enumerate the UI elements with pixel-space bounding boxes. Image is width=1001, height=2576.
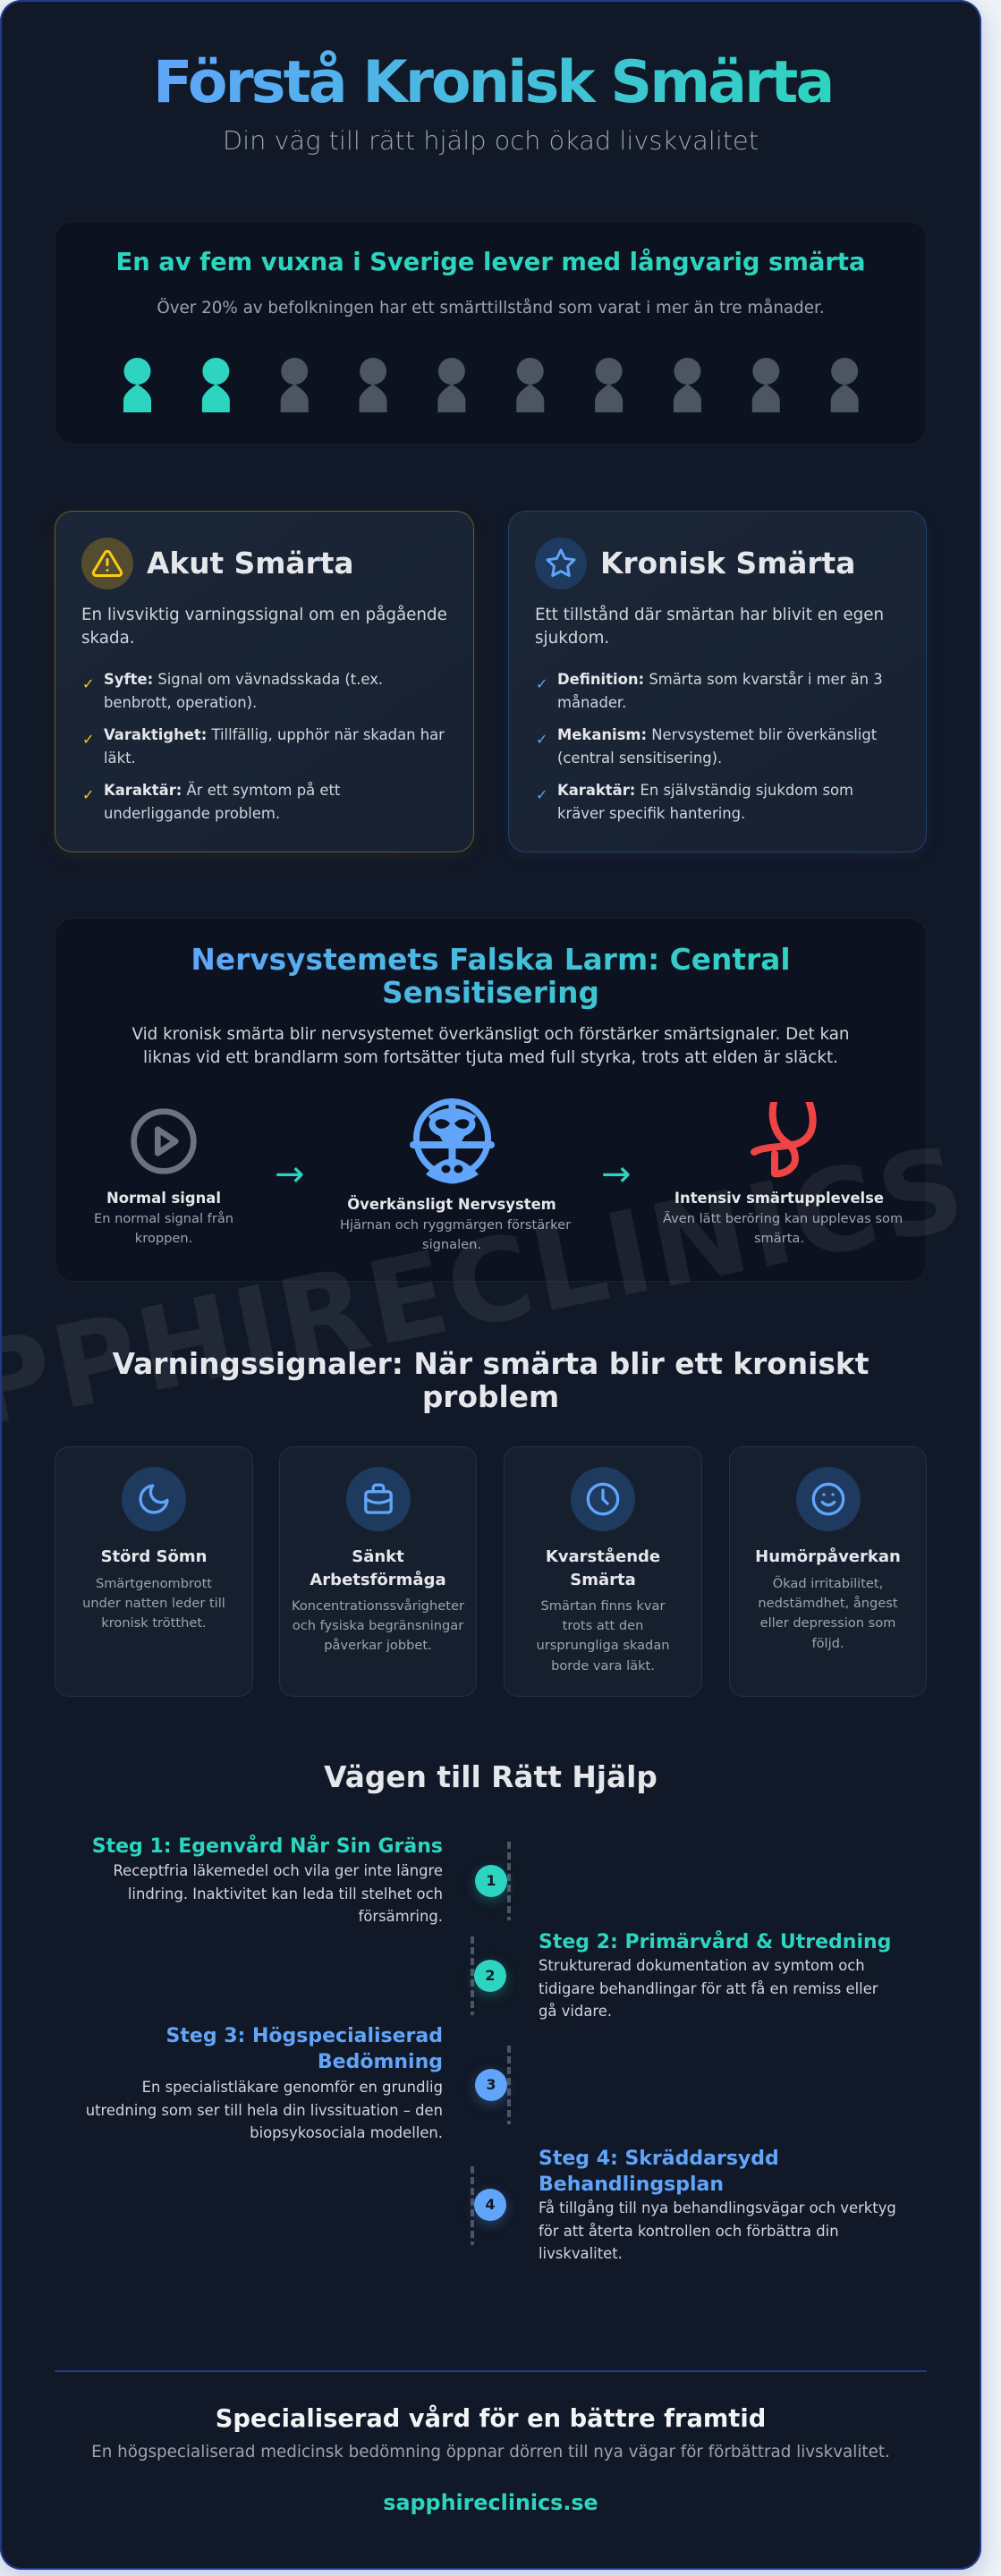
explanation text: Vid kronisk smärta blir nervsystemet överkänsligt och förstärker smärtsignaler. Det kan bbox=[131, 1025, 850, 1044]
warning section heading: Varningssignaler: När smärta blir ett kroniskt bbox=[113, 1347, 869, 1381]
list item: character bbox=[557, 782, 853, 822]
icon: hypersensitive nervous system bbox=[410, 1098, 495, 1184]
step text: En specialistläkare genomför en grundlig bbox=[142, 2079, 443, 2096]
step title: Behandlingsplan bbox=[539, 2174, 724, 2195]
step number: 1 bbox=[486, 1872, 496, 1889]
step text: Strukturerad dokumentation av symtom och bbox=[539, 1957, 865, 1974]
step number: 4 bbox=[485, 2196, 496, 2213]
list item: mechanism bbox=[557, 726, 877, 767]
warning card: work capacity bbox=[279, 1446, 477, 1697]
warning card: mood bbox=[729, 1446, 927, 1697]
flow step: intense pain: Även lätt beröring kan upplevas som bbox=[663, 1211, 903, 1226]
pictogram: 2 of 10 persons highlighted bbox=[123, 358, 859, 412]
arrow: → bbox=[601, 1154, 632, 1195]
card text: Ökad irritabilitet, bbox=[773, 1576, 883, 1591]
intro text bbox=[81, 605, 447, 648]
explanation text bbox=[131, 1025, 850, 1067]
list item: purpose: Syfte: Signal om vävnadsskada (t.ex. bbox=[104, 671, 383, 688]
flow step: intense pain bbox=[663, 1190, 903, 1246]
step 1 bbox=[92, 1835, 512, 1925]
card title: Störd Sömn bbox=[101, 1547, 207, 1566]
card title: Smärta bbox=[570, 1571, 636, 1589]
icon: star bbox=[535, 538, 587, 589]
intro text: skada. bbox=[81, 629, 135, 648]
flow step: normal signal: Normal signal bbox=[106, 1190, 221, 1207]
flow step: normal signal bbox=[94, 1190, 233, 1246]
subtitle: Din väg till rätt hjälp och ökad livskvalitet bbox=[223, 125, 759, 156]
connector bbox=[471, 2166, 474, 2245]
card text: påverkar jobbet. bbox=[324, 1638, 432, 1653]
card title: Kvarstående bbox=[546, 1547, 660, 1566]
icon: smiley bbox=[796, 1467, 861, 1531]
connector bbox=[507, 1842, 511, 1920]
list item: mechanism: Mekanism: Nervsystemet blir överkänsligt bbox=[557, 726, 877, 743]
statistic text: Över 20% av befolkningen har ett smärttillstånd som varat i mer än tre månader. bbox=[157, 299, 825, 318]
step title bbox=[166, 2025, 443, 2073]
step text: tidigare behandlingar för att få en remiss eller bbox=[539, 1980, 878, 1997]
list item: purpose: benbrott, operation). bbox=[104, 694, 257, 711]
step text: Få tillgång till nya behandlingsvägar och verktyg bbox=[539, 2199, 896, 2216]
warning card: disturbed sleep bbox=[55, 1446, 253, 1697]
heading: Sensitisering bbox=[382, 976, 599, 1010]
list item: character bbox=[104, 782, 340, 822]
card title bbox=[310, 1547, 446, 1589]
flow step: normal signal: En normal signal från bbox=[94, 1211, 233, 1226]
flow step: hypersensitive nervous system bbox=[340, 1195, 571, 1252]
icon: warning triangle bbox=[81, 538, 133, 589]
step text: försämring. bbox=[359, 1908, 443, 1925]
step text: livskvalitet. bbox=[539, 2245, 623, 2262]
card text: och fysiska begränsningar bbox=[293, 1618, 463, 1633]
card text: ursprungliga skadan bbox=[536, 1638, 670, 1653]
list item: duration bbox=[104, 726, 445, 767]
card text: kronisk trötthet. bbox=[101, 1615, 207, 1631]
flow step: hypersensitive nervous system: signalen. bbox=[422, 1237, 481, 1252]
flow step: normal signal: kroppen. bbox=[135, 1231, 192, 1246]
card text: trots att den bbox=[563, 1618, 643, 1633]
step number: 2 bbox=[485, 1967, 496, 1984]
step title: Steg 3: Högspecialiserad bbox=[166, 2025, 443, 2047]
step number bbox=[475, 2069, 507, 2101]
intro text bbox=[535, 605, 884, 648]
step text: för att återta kontrollen och förbättra din bbox=[539, 2223, 839, 2240]
step title: Steg 1: Egenvård Når Sin Gräns bbox=[92, 1835, 443, 1858]
card text: under natten leder till bbox=[82, 1596, 225, 1611]
flow step: hypersensitive nervous system: Hjärnan och ryggmärgen förstärker bbox=[340, 1217, 571, 1233]
card title: Humörpåverkan bbox=[755, 1547, 901, 1566]
list item: duration: Varaktighet: Tillfällig, upphör när skadan har bbox=[104, 726, 445, 743]
list item: character: Karaktär: En självständig sjukdom som bbox=[557, 782, 853, 799]
intro text: Ett tillstånd där smärtan har blivit en egen bbox=[535, 606, 884, 624]
step title bbox=[539, 2147, 779, 2195]
step number bbox=[474, 1960, 506, 1992]
arrow: → bbox=[275, 1154, 305, 1195]
card text: Koncentrationssvårigheter bbox=[292, 1598, 464, 1614]
list item: definition: Definition: Smärta som kvarstår i mer än 3 bbox=[557, 671, 883, 688]
connector bbox=[471, 1936, 474, 2015]
list item: character: Karaktär: Är ett symtom på ett bbox=[104, 782, 340, 799]
card title: Arbetsförmåga bbox=[310, 1571, 446, 1589]
footer heading: Specialiserad vård för en bättre framtid bbox=[216, 2405, 766, 2433]
warning section heading: problem bbox=[422, 1380, 559, 1414]
step text: Receptfria läkemedel och vila ger inte längre bbox=[113, 1862, 443, 1879]
footer text: En högspecialiserad medicinsk bedömning öppnar dörren till nya vägar för förbättrad livskvalitet. bbox=[91, 2443, 890, 2462]
step title: Steg 4: Skräddarsydd bbox=[539, 2147, 779, 2170]
check mark: ✓ bbox=[82, 731, 94, 748]
step number: 3 bbox=[486, 2076, 496, 2093]
list item: definition: månader. bbox=[557, 694, 626, 711]
step text bbox=[539, 1957, 878, 2020]
icon: intense pain bbox=[751, 1102, 817, 1177]
card text bbox=[292, 1598, 464, 1653]
step text bbox=[86, 2079, 443, 2141]
panel: statistic bbox=[55, 221, 927, 445]
intro text: sjukdom. bbox=[535, 629, 609, 648]
card text: nedstämdhet, ångest bbox=[758, 1596, 898, 1611]
connector bbox=[507, 2046, 511, 2124]
step 4 bbox=[469, 2147, 896, 2262]
step text: utredning som ser till hela din livssituation – den bbox=[86, 2102, 443, 2119]
panel: central sensitisation bbox=[55, 918, 927, 1282]
heading bbox=[191, 944, 791, 1010]
step title: Steg 2: Primärvård & Utredning bbox=[539, 1930, 891, 1953]
step text: lindring. Inaktivitet kan leda till stelhet och bbox=[128, 1885, 443, 1902]
panel: chronic pain bbox=[508, 511, 927, 852]
step 3 bbox=[86, 2025, 513, 2141]
check mark: ✓ bbox=[536, 675, 547, 692]
card text: Smärtan finns kvar bbox=[541, 1598, 665, 1614]
step 2 bbox=[469, 1930, 891, 2020]
flow step: hypersensitive nervous system: Överkänsligt Nervsystem bbox=[347, 1196, 556, 1213]
timeline heading: Vägen till Rätt Hjälp bbox=[324, 1760, 657, 1794]
icon: moon bbox=[122, 1467, 186, 1531]
list item: mechanism: (central sensitisering). bbox=[557, 750, 722, 767]
step text bbox=[539, 2199, 896, 2262]
warning section heading bbox=[113, 1347, 869, 1414]
explanation text: liknas vid ett brandlarm som fortsätter tjuta med full styrka, trots att elden är släckt. bbox=[143, 1048, 838, 1067]
card title: Sänkt bbox=[352, 1547, 404, 1566]
heading: Akut Smärta bbox=[147, 547, 354, 580]
card text bbox=[758, 1576, 898, 1651]
check mark: ✓ bbox=[82, 786, 94, 803]
list item: definition bbox=[557, 671, 883, 711]
list item: duration: läkt. bbox=[104, 750, 136, 767]
card title bbox=[546, 1547, 660, 1589]
panel: acute pain bbox=[55, 511, 474, 852]
icon: briefcase bbox=[346, 1467, 411, 1531]
list item: character: underliggande problem. bbox=[104, 805, 280, 822]
step text: biopsykosociala modellen. bbox=[250, 2124, 443, 2141]
heading: Kronisk Smärta bbox=[600, 547, 855, 580]
heading: Nervsystemets Falska Larm: Central bbox=[191, 943, 791, 977]
card text: Smärtgenombrott bbox=[96, 1576, 212, 1591]
title: Förstå Kronisk Smärta bbox=[153, 49, 832, 116]
icon: normal signal bbox=[131, 1108, 197, 1174]
statistic heading: En av fem vuxna i Sverige lever med långvarig smärta bbox=[116, 249, 865, 276]
check mark: ✓ bbox=[82, 675, 94, 692]
card text bbox=[536, 1598, 670, 1674]
step number bbox=[475, 1865, 507, 1897]
step text: gå vidare. bbox=[539, 2003, 612, 2020]
list item: character: kräver specifik hantering. bbox=[557, 805, 745, 822]
card text bbox=[82, 1576, 225, 1631]
card text: följd. bbox=[811, 1636, 844, 1651]
flow step: intense pain: Intensiv smärtupplevelse bbox=[674, 1190, 884, 1207]
website link: sapphireclinics.se bbox=[383, 2490, 598, 2515]
list item: purpose bbox=[104, 671, 383, 711]
check mark: ✓ bbox=[536, 731, 547, 748]
flow step: intense pain: smärta. bbox=[754, 1231, 804, 1246]
warning card: persistent pain bbox=[504, 1446, 702, 1697]
footer bbox=[55, 2370, 927, 2531]
step text bbox=[113, 1862, 443, 1925]
card text: eller depression som bbox=[760, 1615, 895, 1631]
step title: Bedömning bbox=[318, 2051, 443, 2073]
icon: clock bbox=[571, 1467, 635, 1531]
check mark: ✓ bbox=[536, 786, 547, 803]
card text: borde vara läkt. bbox=[551, 1658, 655, 1674]
intro text: En livsviktig varningssignal om en pågående bbox=[81, 606, 447, 624]
step number bbox=[474, 2189, 506, 2221]
